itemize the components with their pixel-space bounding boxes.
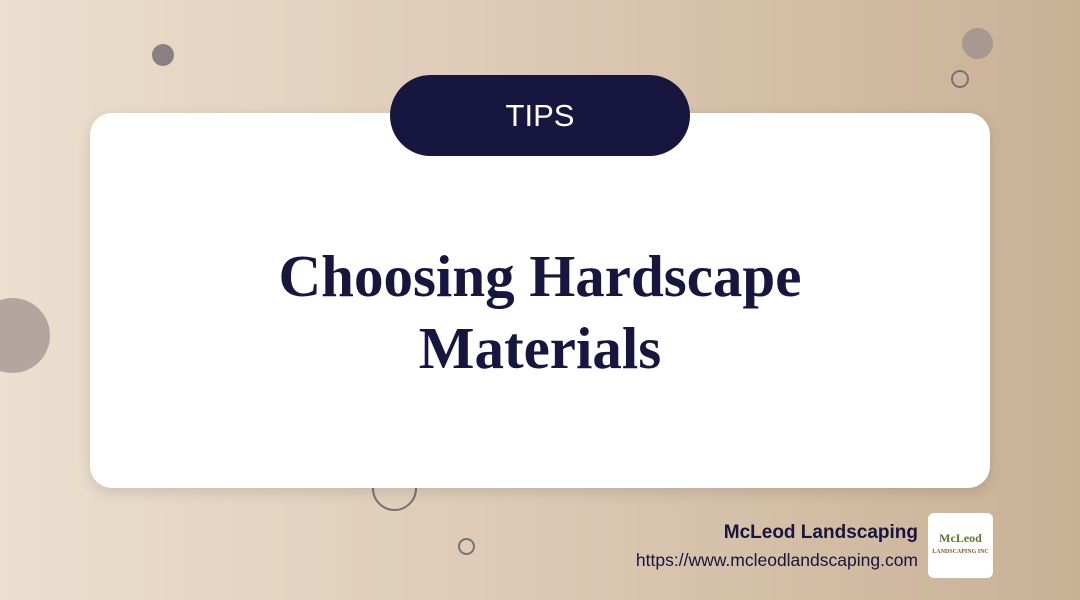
logo — [928, 513, 993, 578]
logo: McLeod — [939, 531, 982, 545]
decorative ring bottom small — [458, 538, 475, 555]
title — [279, 243, 801, 381]
decorative circle top-right — [962, 28, 993, 59]
decorative circle left — [0, 298, 50, 373]
decorative circle top-left — [152, 44, 174, 66]
tips pill — [390, 75, 690, 156]
tips pill: TIPS — [506, 98, 574, 133]
decorative ring top-right — [951, 70, 969, 88]
brand url: https://www.mcleodlandscaping.com — [636, 550, 918, 570]
main card — [90, 113, 990, 488]
decorative ring bottom — [372, 466, 417, 511]
logo: LANDSCAPING INC — [932, 549, 989, 555]
brand name: McLeod Landscaping — [724, 522, 918, 543]
title: Choosing Hardscape — [279, 243, 801, 309]
title: Materials — [419, 315, 661, 381]
